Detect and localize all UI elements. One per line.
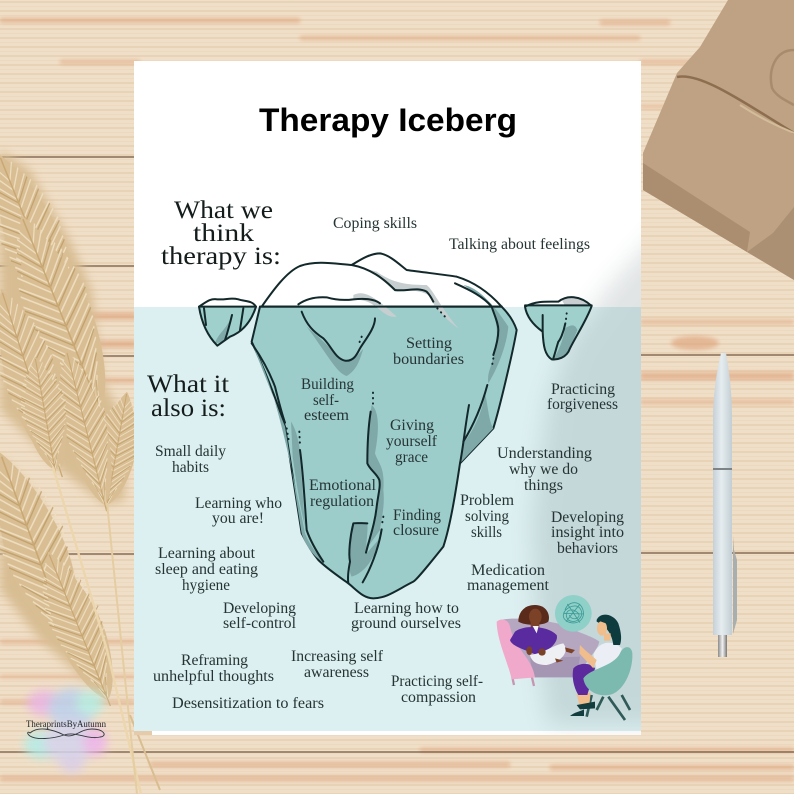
iceberg shading facets bbox=[253, 285, 508, 577]
labels right of iceberg: forgiveness bbox=[547, 396, 618, 413]
labels right of iceberg: things bbox=[524, 477, 563, 494]
labels inside iceberg: grace bbox=[395, 449, 428, 466]
labels below iceberg: Increasing self bbox=[291, 648, 384, 665]
labels right of iceberg: behaviors bbox=[557, 540, 618, 557]
labels left of iceberg: Small daily bbox=[155, 443, 226, 460]
white pen bbox=[713, 353, 737, 657]
labels inside iceberg: Building bbox=[301, 376, 354, 393]
paper sheet bbox=[134, 61, 680, 735]
labels right of iceberg: Practicing bbox=[551, 381, 615, 398]
labels right of iceberg: Developing bbox=[551, 509, 624, 526]
labels below iceberg: compassion bbox=[401, 689, 476, 706]
labels left of iceberg bbox=[155, 443, 282, 594]
labels right of iceberg: Problem bbox=[460, 492, 515, 509]
heading: what we think therapy is bbox=[161, 197, 281, 270]
iceberg crack lines bbox=[252, 265, 502, 583]
labels below iceberg: Desensitization to fears bbox=[172, 695, 324, 712]
labels inside iceberg: yourself bbox=[386, 433, 438, 450]
labels below iceberg: Reframing bbox=[181, 652, 248, 669]
heading: what we think therapy is: therapy is: bbox=[161, 243, 281, 270]
labels inside iceberg: regulation bbox=[310, 493, 374, 510]
labels inside iceberg: self- bbox=[313, 392, 339, 409]
labels inside iceberg: Finding bbox=[393, 507, 441, 524]
main iceberg bbox=[252, 253, 517, 598]
therapist in armchair bbox=[570, 615, 632, 720]
labels inside iceberg: closure bbox=[393, 522, 439, 539]
client seated on sofa bbox=[510, 605, 575, 665]
labels above water: Coping skills bbox=[333, 215, 417, 232]
labels right of iceberg: Medication bbox=[471, 562, 545, 579]
labels above water bbox=[333, 215, 590, 253]
labels left of iceberg: hygiene bbox=[182, 577, 230, 594]
thought bubble with scribble bbox=[555, 595, 592, 632]
labels left of iceberg: sleep and eating bbox=[155, 561, 258, 578]
labels below iceberg: unhelpful thoughts bbox=[153, 668, 274, 685]
illustration: therapy session bbox=[497, 595, 632, 720]
logo: TheraprintsByAutumn watercolor mark: TheraprintsByAutumn bbox=[26, 719, 106, 729]
labels below iceberg: Learning how to bbox=[354, 600, 459, 617]
small iceberg left bbox=[199, 299, 256, 346]
labels below iceberg: Developing bbox=[223, 600, 296, 617]
dried pampas grass bbox=[0, 142, 160, 794]
labels below iceberg: awareness bbox=[304, 664, 369, 681]
sofa bbox=[497, 619, 599, 686]
heading: what we think therapy is: What we bbox=[174, 197, 273, 224]
labels below iceberg bbox=[153, 600, 483, 712]
labels left of iceberg: Learning about bbox=[158, 545, 256, 562]
labels right of iceberg: insight into bbox=[551, 524, 624, 541]
iceberg underwater body bbox=[252, 307, 517, 598]
small iceberg right bbox=[525, 297, 592, 359]
iceberg tip above water bbox=[262, 253, 502, 307]
labels below iceberg: Practicing self- bbox=[391, 673, 483, 690]
labels inside iceberg: Setting bbox=[406, 335, 452, 352]
title: Therapy Iceberg bbox=[259, 102, 517, 138]
labels right of iceberg: why we do bbox=[509, 461, 578, 478]
labels inside iceberg: boundaries bbox=[393, 351, 464, 368]
labels left of iceberg: habits bbox=[172, 459, 209, 476]
labels right of iceberg: Understanding bbox=[497, 445, 592, 462]
heading: what it also is: also is: bbox=[151, 395, 226, 422]
heading: what it also is: What it bbox=[147, 371, 229, 398]
heading: what it also is bbox=[147, 371, 229, 422]
labels left of iceberg: you are! bbox=[212, 510, 264, 527]
labels right of iceberg bbox=[460, 381, 624, 594]
labels inside iceberg: Emotional bbox=[309, 477, 377, 494]
labels inside iceberg: esteem bbox=[304, 407, 350, 424]
labels inside iceberg: Giving bbox=[390, 417, 434, 434]
logo: TheraprintsByAutumn watercolor mark bbox=[24, 688, 107, 773]
labels below iceberg: ground ourselves bbox=[351, 615, 461, 632]
labels right of iceberg: skills bbox=[471, 524, 502, 541]
labels below iceberg: self-control bbox=[223, 615, 297, 632]
labels left of iceberg: Learning who bbox=[195, 495, 282, 512]
labels right of iceberg: management bbox=[467, 577, 550, 594]
heading: what we think therapy is: think bbox=[193, 220, 255, 247]
kraft paper gift package with twine bbox=[643, 0, 794, 280]
labels inside iceberg bbox=[301, 335, 464, 539]
labels above water: Talking about feelings bbox=[449, 236, 590, 253]
labels right of iceberg: solving bbox=[465, 508, 509, 525]
